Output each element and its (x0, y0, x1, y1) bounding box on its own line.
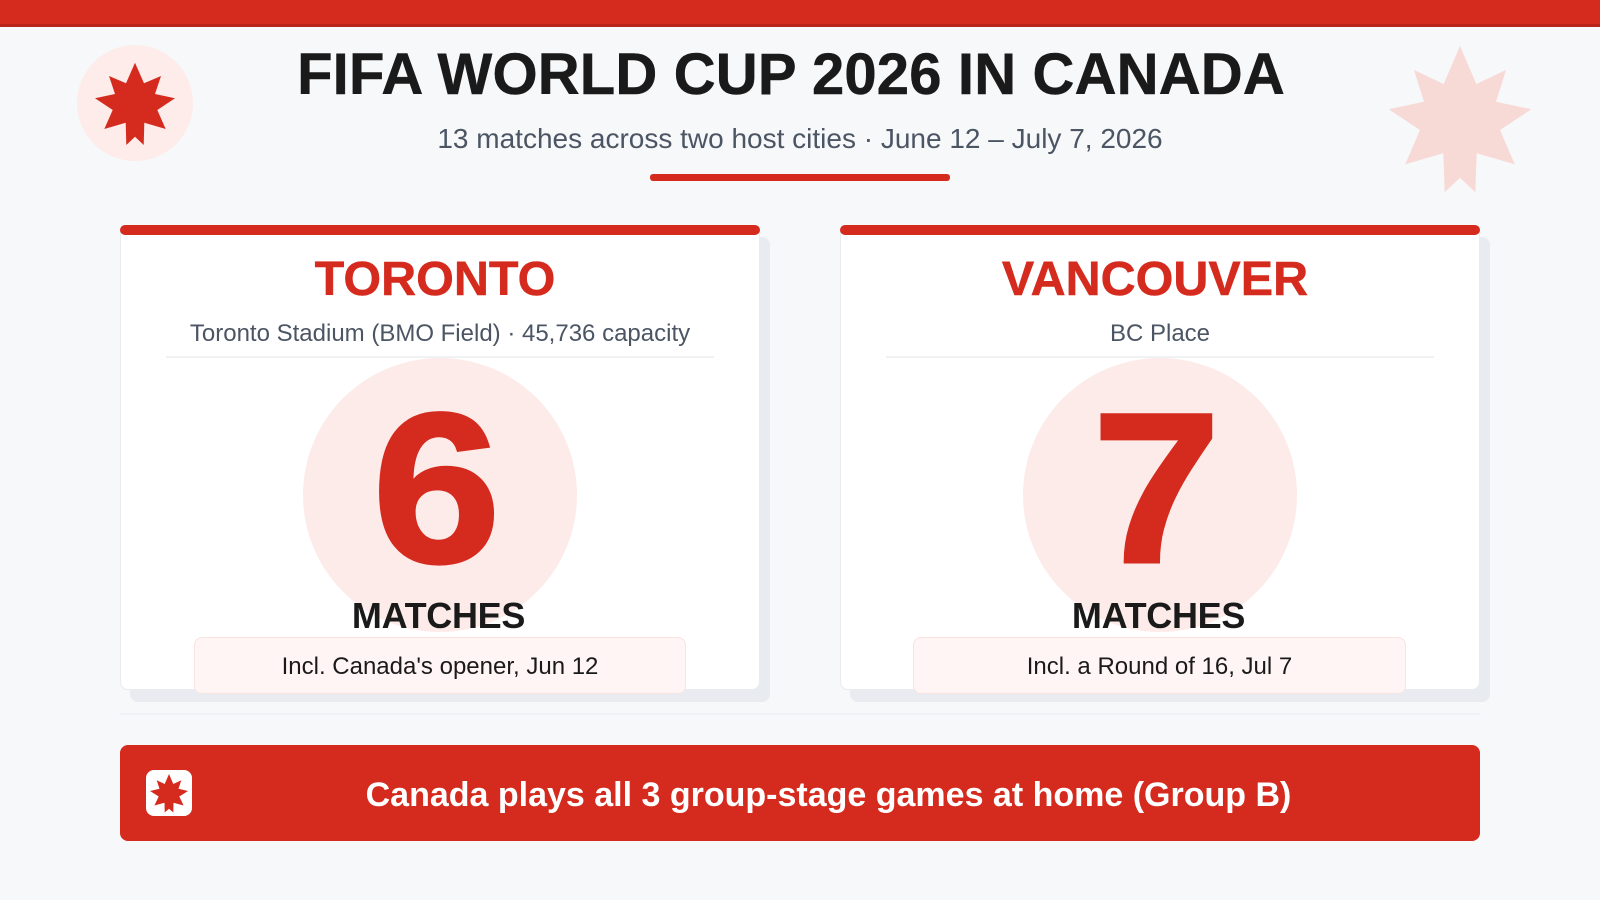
title underline (650, 174, 950, 181)
icon: left maple badge (77, 45, 193, 161)
big number: 7 (1092, 369, 1221, 608)
big number: 6 (372, 369, 501, 608)
banner text: Canada plays all 3 group-stage games at home (Group B) (366, 776, 1291, 814)
title: FIFA WORLD CUP 2026 IN CANADA (297, 42, 1285, 107)
card accent bar (840, 225, 1480, 235)
matches label: MATCHES (1072, 595, 1245, 636)
venue: BC Place (1110, 320, 1210, 347)
venue: Toronto Stadium (BMO Field) · 45,736 capacity (190, 320, 690, 347)
banner (120, 745, 1480, 841)
icon: right faded maple star (1389, 46, 1531, 192)
note: Incl. a Round of 16, Jul 7 (1027, 653, 1292, 680)
divider (166, 356, 714, 358)
top bar (0, 0, 1600, 27)
matches label: MATCHES (352, 595, 525, 636)
city name: TORONTO (315, 252, 555, 306)
number circle (1023, 358, 1297, 632)
card shadow (130, 237, 770, 702)
card body (840, 225, 1480, 690)
card shadow (850, 237, 1490, 702)
card accent bar (120, 225, 760, 235)
divider (886, 356, 1434, 358)
icon: banner maple (146, 770, 192, 816)
note (194, 637, 686, 694)
panel: Vancouver (840, 225, 1490, 702)
number circle (303, 358, 577, 632)
city name: VANCOUVER (1002, 252, 1308, 306)
subtitle: 13 matches across two host cities · June 12 – July 7, 2026 (437, 123, 1163, 154)
panel: Toronto (120, 225, 770, 702)
note (913, 637, 1406, 694)
card body (120, 225, 760, 690)
note: Incl. Canada's opener, Jun 12 (282, 653, 598, 680)
